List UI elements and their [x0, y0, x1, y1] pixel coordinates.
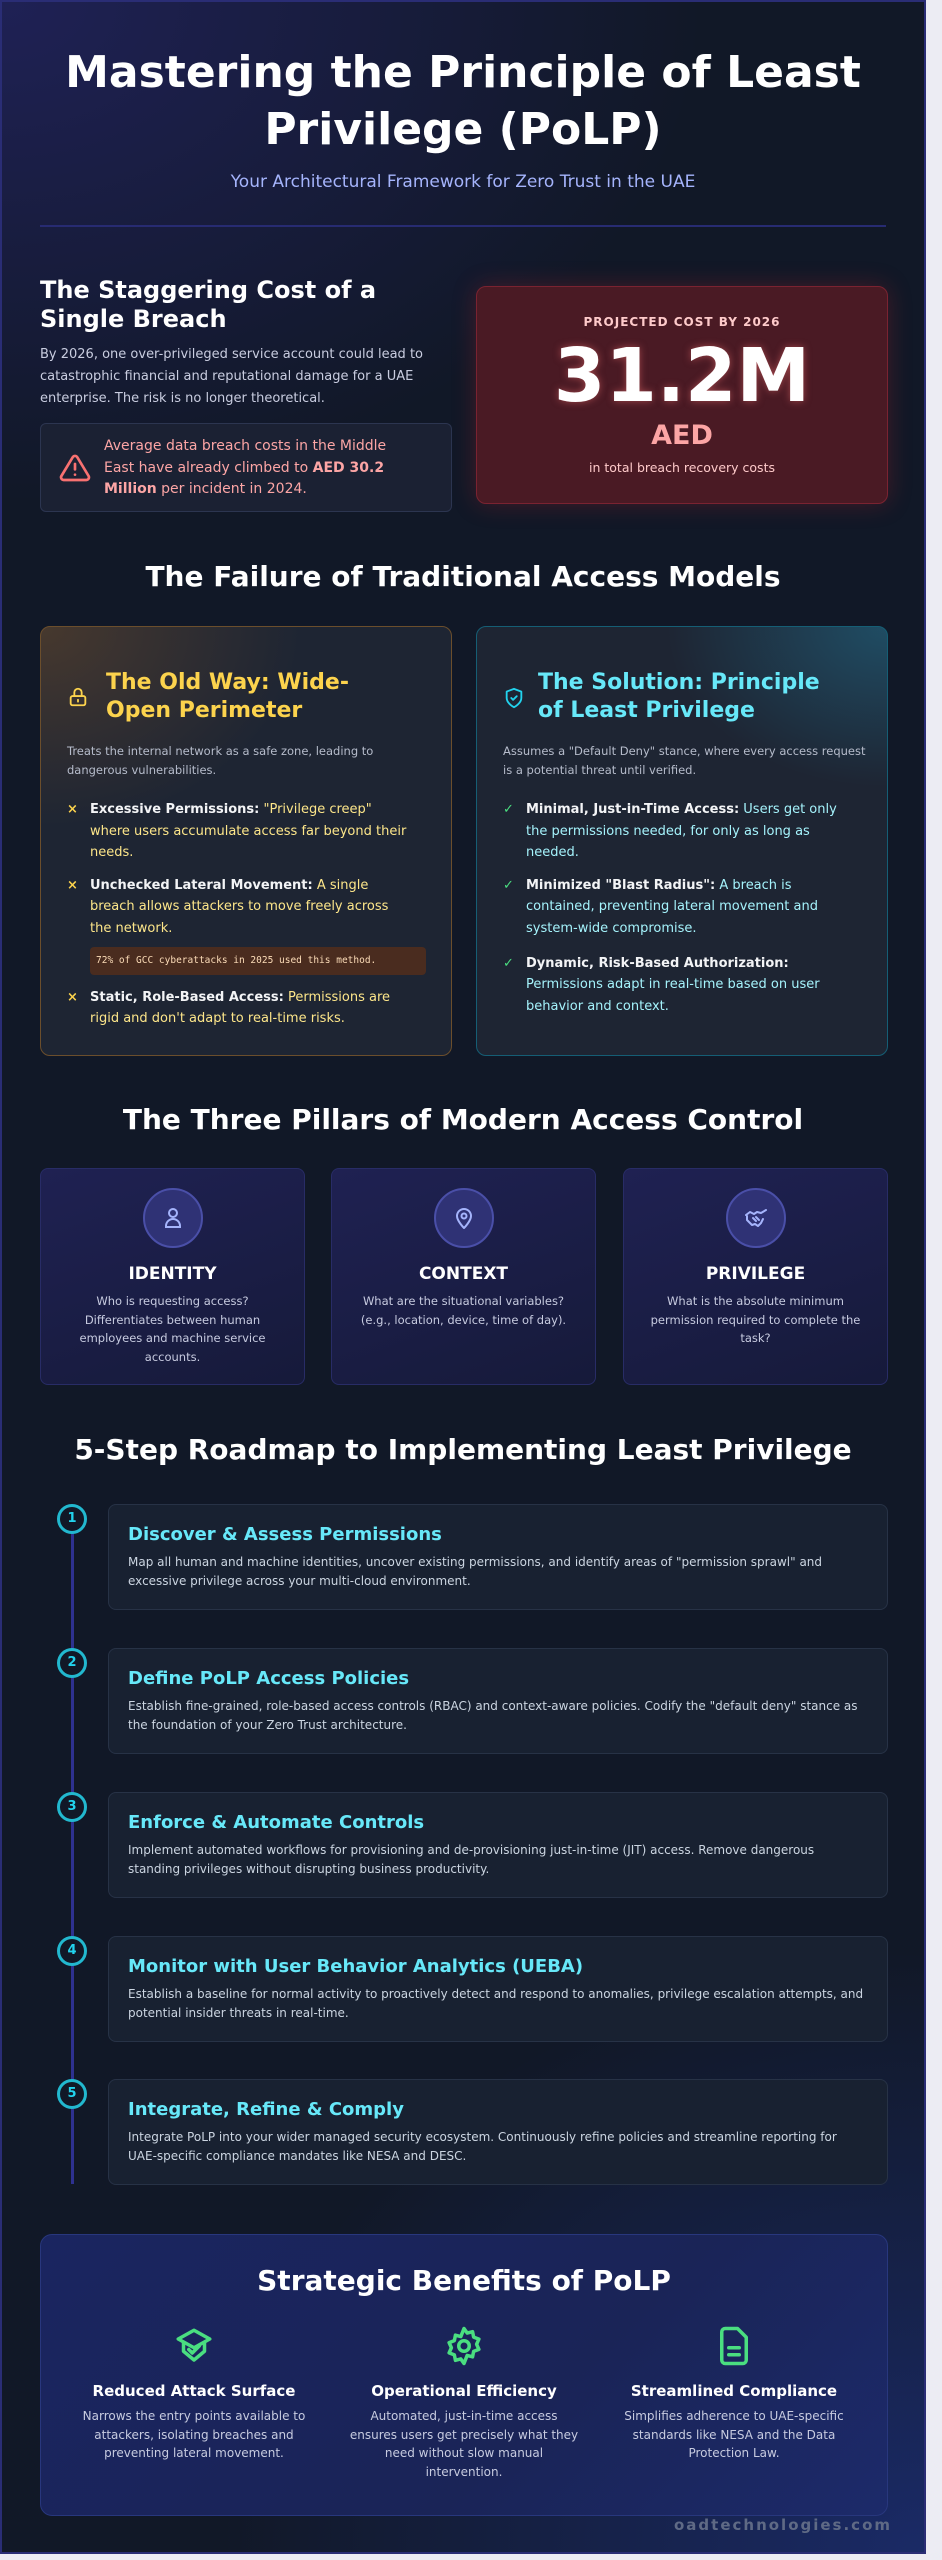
benefit: operational efficiency: Automated, just-in-time access ensures users get precisely what they need without slow manual intervention.: [350, 2409, 578, 2478]
benefit: reduced attack surface: Narrows the entry points available to attackers, isolating breaches and preventing lateral movement.: [83, 2409, 305, 2460]
step 5: Integrate, Refine & Comply: [128, 2099, 404, 2120]
benefit: streamlined compliance: [624, 2326, 844, 2460]
card title: [538, 670, 820, 723]
bullet list: Excessive Permissions: "Privilege creep" where users accumulate access far beyond their needs.: [90, 802, 406, 860]
heading: staggering cost: Single Breach: [40, 305, 227, 333]
bullet list: ✓: [503, 878, 514, 893]
bullet list: Minimized "Blast Radius": A breach is contained, preventing lateral movement and system-wide compromise.: [526, 878, 818, 936]
bullet list: ×: [67, 990, 78, 1005]
bullet list: ×: [67, 802, 78, 817]
panel: privilege: PRIVILEGE: [706, 1264, 805, 1284]
title: Privilege (PoLP): [264, 104, 662, 155]
panel: context: [331, 1168, 596, 1385]
panel: privilege: What is the absolute minimum permission required to complete the task?: [651, 1294, 860, 1345]
title: Mastering the Principle of Least: [65, 47, 861, 98]
currency: AED: [651, 420, 713, 451]
benefit: reduced attack surface: [83, 2328, 305, 2460]
icon: shield check: [506, 688, 522, 708]
benefit: operational efficiency: [350, 2326, 578, 2478]
panel: projected cost: [476, 286, 888, 504]
heading: roadmap: 5-Step Roadmap to Implementing Least Privilege: [74, 1433, 852, 1466]
timeline line: [71, 1519, 74, 2184]
benefit: operational efficiency: Operational Efficiency: [371, 2382, 557, 2400]
panel: identity: Who is requesting access? Differentiates between human employees and machine service accounts.: [80, 1294, 265, 1364]
callout text: Average data breach costs in the Middle East have already climbed to AED 30.2 Million per incident in 2024.: [104, 438, 386, 497]
step 4: [57, 1936, 888, 2042]
step 4: 4: [67, 1943, 77, 1958]
bullet list: [503, 802, 837, 1014]
benefit: streamlined compliance: Simplifies adherence to UAE-specific standards like NESA and the Data Protection Law.: [624, 2409, 844, 2460]
benefit: streamlined compliance: Streamlined Compliance: [631, 2382, 837, 2400]
icon: map pin: [434, 1188, 494, 1248]
step 1: Discover & Assess Permissions: [128, 1524, 442, 1545]
step 2: 2: [67, 1655, 77, 1670]
bullet list: Static, Role-Based Access: Permissions are rigid and don't adapt to real-time risks.: [90, 990, 390, 1026]
step 2: Define PoLP Access Policies: [128, 1668, 409, 1689]
step 3: Enforce & Automate Controls: [128, 1812, 424, 1833]
panel: old way: [40, 626, 452, 1056]
step 3: [57, 1792, 888, 1898]
heading: failure of traditional models: The Failure of Traditional Access Models: [145, 560, 781, 593]
step 5: 5: [67, 2086, 77, 2101]
text block: breach intro: By 2026, one over-privileged service account could lead to catastrophic financial and reputational damage for a UAE enterprise. The risk is no longer theoretical.: [40, 347, 423, 406]
panel: strategic benefits: [40, 2234, 888, 2516]
step 1: [57, 1504, 888, 1610]
step 2: [57, 1648, 888, 1754]
icon: warning: [60, 454, 90, 482]
footer: brand: oadtechnologies.com: [674, 2516, 892, 2534]
step 1: Map all human and machine identities, uncover existing permissions, and identify areas of "permission sprawl" and excessive privilege across your multi-cloud environment.: [128, 1555, 822, 1588]
step 3: Implement automated workflows for provisioning and de-provisioning just-in-time (JIT) access. Remove dangerous standing privileges without disrupting business productivity.: [128, 1843, 814, 1876]
card title: of Least Privilege: [538, 698, 755, 723]
card title: Open Perimeter: [106, 698, 302, 723]
callout: middle east breach cost: [40, 423, 452, 512]
panel: context: What are the situational variables? (e.g., location, device, time of day).: [361, 1294, 566, 1327]
card description: Assumes a "Default Deny" stance, where every access request is a potential threat until verified.: [503, 744, 866, 777]
stat callout: [90, 947, 426, 975]
step 4: Establish a baseline for normal activity to proactively detect and respond to anomalies, privilege escalation attempts, and potential insider threats in real-time.: [128, 1987, 863, 2020]
heading: staggering cost: [40, 276, 376, 333]
bullet list: Dynamic, Risk-Based Authorization: Permissions adapt in real-time based on user behavior and context.: [526, 956, 820, 1014]
bullet list: Unchecked Lateral Movement: A single breach allows attackers to move freely across the network.: [90, 878, 388, 936]
stat callout: 72% of GCC cyberattacks in 2025 used this method.: [96, 955, 376, 966]
icon: lock: [70, 688, 86, 706]
icon: user: [143, 1188, 203, 1248]
heading: three pillars: The Three Pillars of Modern Access Control: [123, 1103, 803, 1136]
bullet list: [67, 802, 426, 1026]
bullet list: Minimal, Just-in-Time Access: Users get only the permissions needed, for only as long as needed.: [526, 802, 837, 860]
step 2: Establish fine-grained, role-based access controls (RBAC) and context-aware policies. Codify the "default deny" stance as the foundation of your Zero Trust architecture.: [128, 1699, 858, 1732]
label: PROJECTED COST BY 2026: [584, 315, 780, 329]
heading: Strategic Benefits of PoLP: [257, 2264, 671, 2297]
caption: in total breach recovery costs: [589, 460, 775, 475]
card title: [106, 670, 349, 723]
step 1: 1: [67, 1511, 77, 1526]
step 3: 3: [67, 1799, 77, 1814]
card title: The Old Way: Wide-: [106, 670, 349, 695]
step 5: [57, 2079, 888, 2185]
panel: context: CONTEXT: [419, 1264, 508, 1284]
step 4: Monitor with User Behavior Analytics (UEBA): [128, 1956, 583, 1977]
card description: Treats the internal network as a safe zone, leading to dangerous vulnerabilities.: [67, 744, 373, 777]
title: [65, 47, 861, 155]
bullet list: ×: [67, 878, 78, 893]
panel: identity: [40, 1168, 305, 1385]
panel: privilege: [623, 1168, 888, 1385]
icon: handshake: [726, 1188, 786, 1248]
subtitle: Your Architectural Framework for Zero Trust in the UAE: [231, 172, 695, 192]
panel: identity: IDENTITY: [128, 1264, 217, 1284]
step 5: Integrate PoLP into your wider managed security ecosystem. Continuously refine policies and streamline reporting for UAE-specific compliance mandates like NESA and DESC.: [128, 2130, 837, 2163]
benefit: reduced attack surface: Reduced Attack Surface: [93, 2382, 295, 2400]
heading: staggering cost: The Staggering Cost of a: [40, 276, 376, 304]
bullet list: ✓: [503, 956, 514, 971]
big number: 31.2M: [554, 333, 810, 419]
card title: The Solution: Principle: [538, 670, 820, 695]
bullet list: ✓: [503, 802, 514, 817]
panel: solution: [476, 626, 888, 1056]
